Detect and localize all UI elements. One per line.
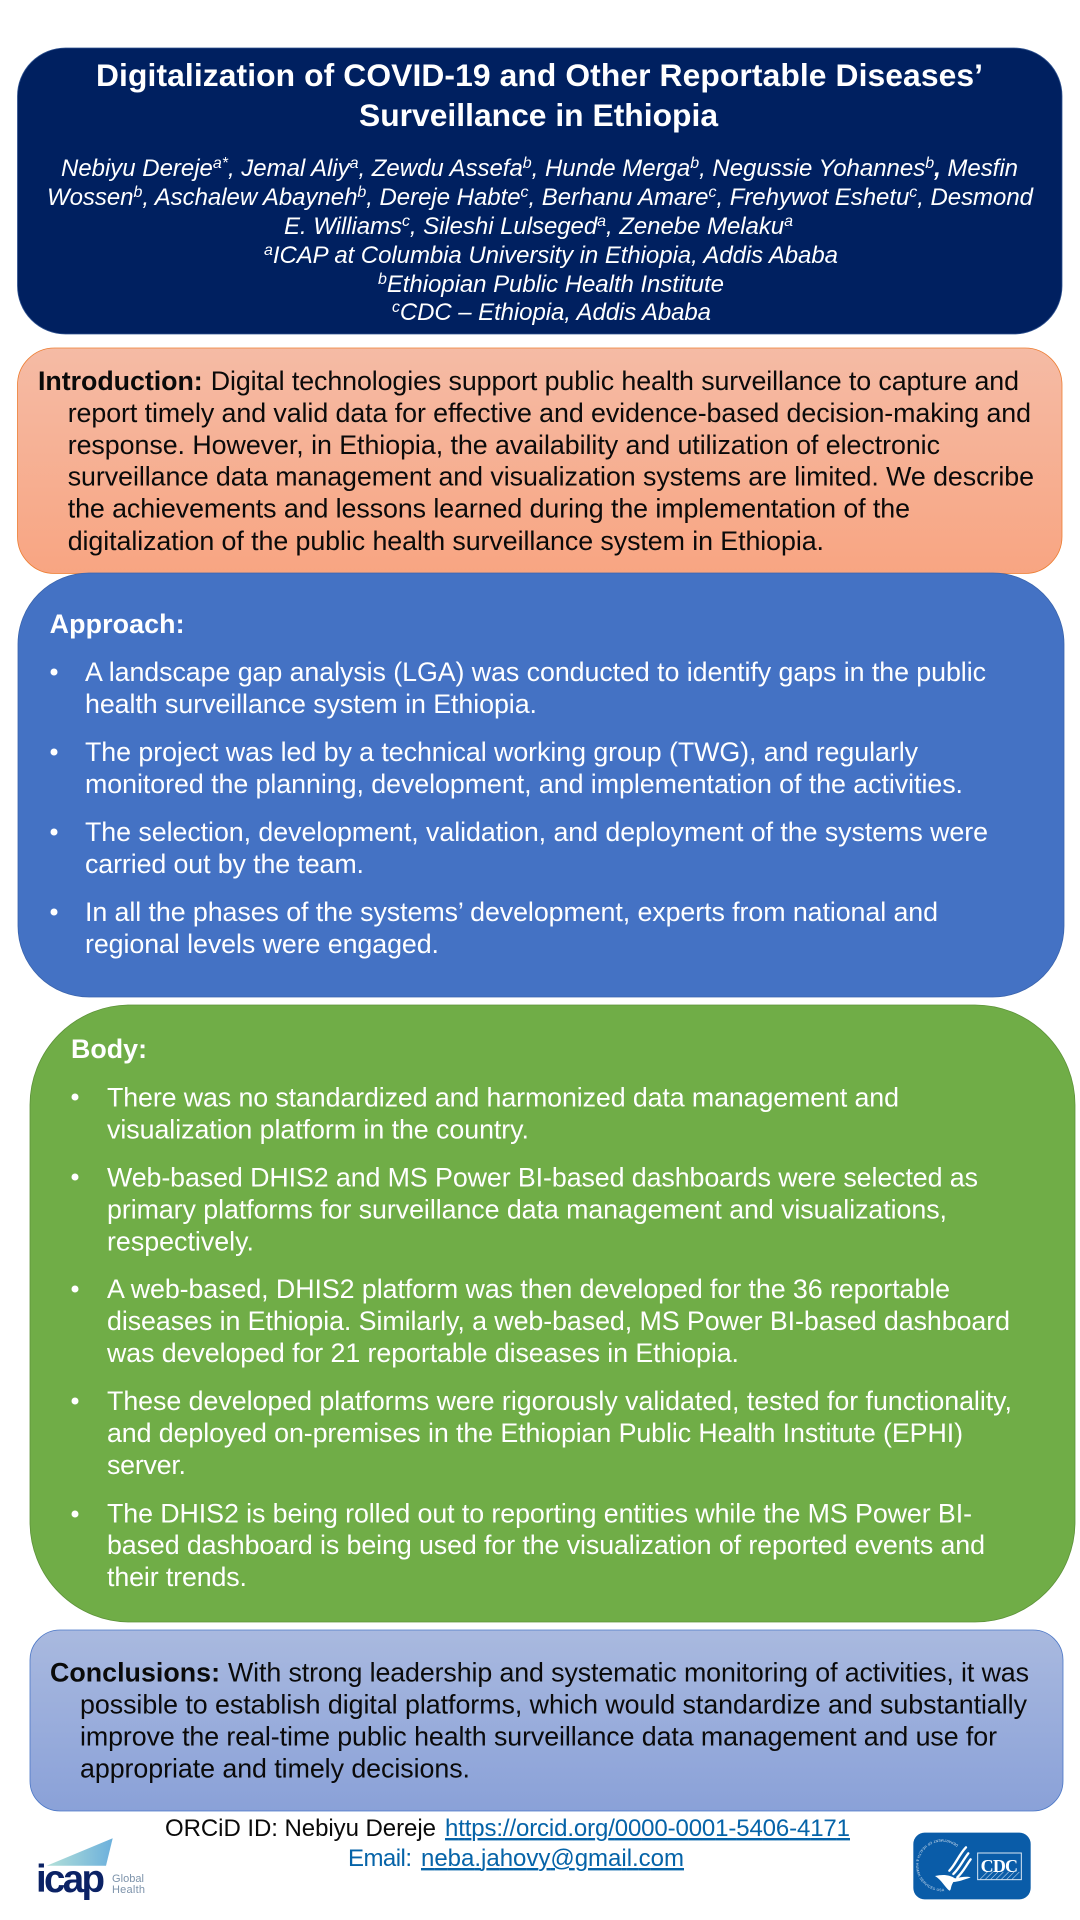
blue panel background bbox=[18, 573, 1064, 997]
navy panel background bbox=[18, 48, 1062, 334]
bullet list: body points: A web-based, DHIS2 platform was then developed for the 36 reportable bbox=[107, 1274, 950, 1304]
text block: affiliations: CDC – Ethiopia, Addis Ababa bbox=[400, 299, 711, 326]
text block: affiliations: a bbox=[264, 242, 273, 259]
panel: conclusions bbox=[30, 1630, 1063, 1811]
text block: authors: a* bbox=[213, 155, 229, 172]
text block: authors: b bbox=[523, 155, 532, 172]
text block: authors: c bbox=[402, 213, 410, 230]
text block: authors: , Zenebe Melaku bbox=[606, 213, 784, 240]
icon: CDC logo: DEPARTMENT OF HEALTH & HUMAN SERVICES USA bbox=[916, 1839, 958, 1892]
panel: body bbox=[30, 1005, 1075, 1622]
bullet list: approach points: A landscape gap analysis (LGA) was conducted to identify gaps in the public bbox=[85, 657, 986, 687]
icon: CDC logo: CDC bbox=[981, 1856, 1018, 1876]
text block: introduction: the achievements and lessons learned during the implementation of the bbox=[68, 494, 910, 524]
panel: approach bbox=[18, 573, 1064, 997]
icon: ICAP Global Health logo: Global bbox=[112, 1873, 144, 1885]
text block: authors: a bbox=[597, 213, 606, 230]
heading: approach: Approach: bbox=[50, 609, 185, 639]
bullet list: approach points: carried out by the team. bbox=[85, 849, 364, 879]
bullet list: body points: based dashboard is being used for the visualization of reported events and bbox=[107, 1530, 985, 1560]
text block: conclusions: Conclusions: bbox=[50, 1658, 220, 1688]
text block: authors: a bbox=[350, 155, 359, 172]
bullet list: approach points: health surveillance system in Ethiopia. bbox=[85, 689, 537, 719]
text block: authors: b bbox=[357, 184, 366, 201]
text block: authors: , Aschalew Abayneh bbox=[142, 184, 357, 211]
text block: authors: , Berhanu Amare bbox=[528, 184, 709, 211]
bullet list: body points: diseases in Ethiopia. Similarly, a web-based, MS Power BI-based dashboard bbox=[107, 1306, 1010, 1336]
bullet list: approach points: monitored the planning, development, and implementation of the activities. bbox=[85, 769, 963, 799]
text block: authors: , Dereje Habte bbox=[366, 184, 521, 211]
text block: authors: c bbox=[521, 184, 529, 201]
text block: authors: b bbox=[690, 155, 699, 172]
text block: authors: , bbox=[933, 155, 941, 182]
icon: CDC logo bbox=[913, 1832, 1031, 1900]
bullet list: approach points: regional levels were engaged. bbox=[85, 929, 439, 959]
text block: authors: b bbox=[925, 155, 934, 172]
contact details: neba.jahovy@gmail.com bbox=[421, 1845, 684, 1872]
contact details: Email: bbox=[348, 1845, 412, 1872]
icon: ICAP Global Health logo: icap bbox=[36, 1858, 105, 1901]
green panel background bbox=[30, 1005, 1075, 1622]
bullet list: body points: respectively. bbox=[107, 1226, 254, 1256]
text block: introduction: response. However, in Ethiopia, the availability and utilization of electronic bbox=[68, 430, 940, 460]
text block: authors: , Desmond bbox=[917, 184, 1034, 211]
text block: conclusions: possible to establish digital platforms, which would standardize and substantially bbox=[80, 1690, 1028, 1720]
bullet list: body points: These developed platforms were rigorously validated, tested for functionality, bbox=[107, 1386, 1012, 1416]
bullet list: body points: primary platforms for surveillance data management and visualizations, bbox=[107, 1194, 947, 1224]
text block: affiliations: ICAP at Columbia University in Ethiopia, Addis Ababa bbox=[273, 242, 838, 269]
text block: authors: , Negussie Yohannes bbox=[699, 155, 925, 182]
text block: authors: Mesfin bbox=[941, 155, 1018, 182]
text block: introduction: digitalization of the public health surveillance system in Ethiopia. bbox=[68, 526, 824, 556]
heading: poster title: Digitalization of COVID-19 and Other Reportable Diseases’ bbox=[96, 57, 983, 93]
bullet list: approach points: The selection, development, validation, and deployment of the systems were bbox=[85, 817, 988, 847]
text block: authors: E. Williams bbox=[284, 213, 402, 240]
periwinkle panel background bbox=[30, 1630, 1063, 1811]
bullet list: approach points: In all the phases of the systems’ development, experts from national and bbox=[85, 897, 938, 927]
text block: authors: c bbox=[708, 184, 716, 201]
text block: authors: , Frehywot Eshetu bbox=[716, 184, 909, 211]
text block: conclusions: With strong leadership and systematic monitoring of activities, it was bbox=[228, 1658, 1029, 1688]
text block: authors: , Zewdu Assefa bbox=[358, 155, 523, 182]
bullet list: body points: was developed for 21 reportable diseases in Ethiopia. bbox=[106, 1338, 739, 1368]
text block: affiliations: Ethiopian Public Health Institute bbox=[387, 271, 724, 298]
text block: authors: Nebiyu Dereje bbox=[61, 155, 213, 182]
text block: introduction: Introduction: bbox=[38, 366, 203, 396]
contact details: ORCiD ID: Nebiyu Dereje bbox=[165, 1815, 436, 1842]
text block: conclusions: improve the real-time public health surveillance data management and use for bbox=[80, 1722, 997, 1752]
bullet list: body points: Web-based DHIS2 and MS Power BI-based dashboards were selected as bbox=[107, 1162, 978, 1192]
icon: ICAP Global Health logo: Health bbox=[112, 1884, 145, 1896]
heading: poster title bbox=[96, 57, 983, 133]
bullet list: body points bbox=[72, 1082, 1012, 1592]
text block: introduction: Digital technologies support public health surveillance to capture and bbox=[211, 366, 1019, 396]
text block: authors bbox=[47, 155, 1034, 240]
text block: affiliations: c bbox=[392, 299, 400, 316]
text block: authors: b bbox=[133, 184, 142, 201]
heading: body: Body: bbox=[71, 1034, 147, 1064]
text block: authors: a bbox=[784, 213, 793, 230]
text block: authors: , Sileshi Lulseged bbox=[410, 213, 598, 240]
text block: introduction: report timely and valid data for effective and evidence-based decision-making and bbox=[68, 398, 1031, 428]
bullet list: body points: The DHIS2 is being rolled out to reporting entities while the MS Power BI- bbox=[107, 1498, 972, 1528]
text block: authors: , Hunde Merga bbox=[532, 155, 690, 182]
bullet list: body points: and deployed on-premises in the Ethiopian Public Health Institute (EPHI) bbox=[107, 1418, 963, 1448]
orange panel background bbox=[18, 348, 1062, 574]
panel: introduction bbox=[18, 348, 1062, 574]
contact details: https://orcid.org/0000-0001-5406-4171 bbox=[445, 1815, 850, 1842]
text block: authors: , Jemal Aliy bbox=[228, 155, 352, 182]
bullet list: body points: There was no standardized and harmonized data management and bbox=[107, 1082, 899, 1112]
icon: ICAP Global Health logo bbox=[36, 1838, 145, 1901]
bullet list: approach points bbox=[50, 657, 988, 959]
text block: introduction: surveillance data management and visualization systems are limited. We describe bbox=[68, 462, 1034, 492]
text block: authors: Wossen bbox=[47, 184, 134, 211]
bullet list: body points: server. bbox=[107, 1450, 186, 1480]
text block: conclusions: appropriate and timely decisions. bbox=[80, 1754, 470, 1784]
heading: poster title: Surveillance in Ethiopia bbox=[359, 97, 718, 133]
panel: title and authors bbox=[18, 48, 1062, 334]
text block: authors: c bbox=[909, 184, 917, 201]
text block: affiliations bbox=[264, 242, 838, 326]
bullet list: body points: visualization platform in the country. bbox=[107, 1114, 529, 1144]
text block: affiliations: b bbox=[378, 271, 387, 288]
bullet list: body points: their trends. bbox=[107, 1562, 247, 1592]
text block: conclusions bbox=[50, 1658, 1029, 1784]
bullet list: approach points: The project was led by a technical working group (TWG), and regularly bbox=[85, 737, 919, 767]
contact details bbox=[165, 1815, 850, 1872]
text block: introduction bbox=[38, 366, 1034, 556]
